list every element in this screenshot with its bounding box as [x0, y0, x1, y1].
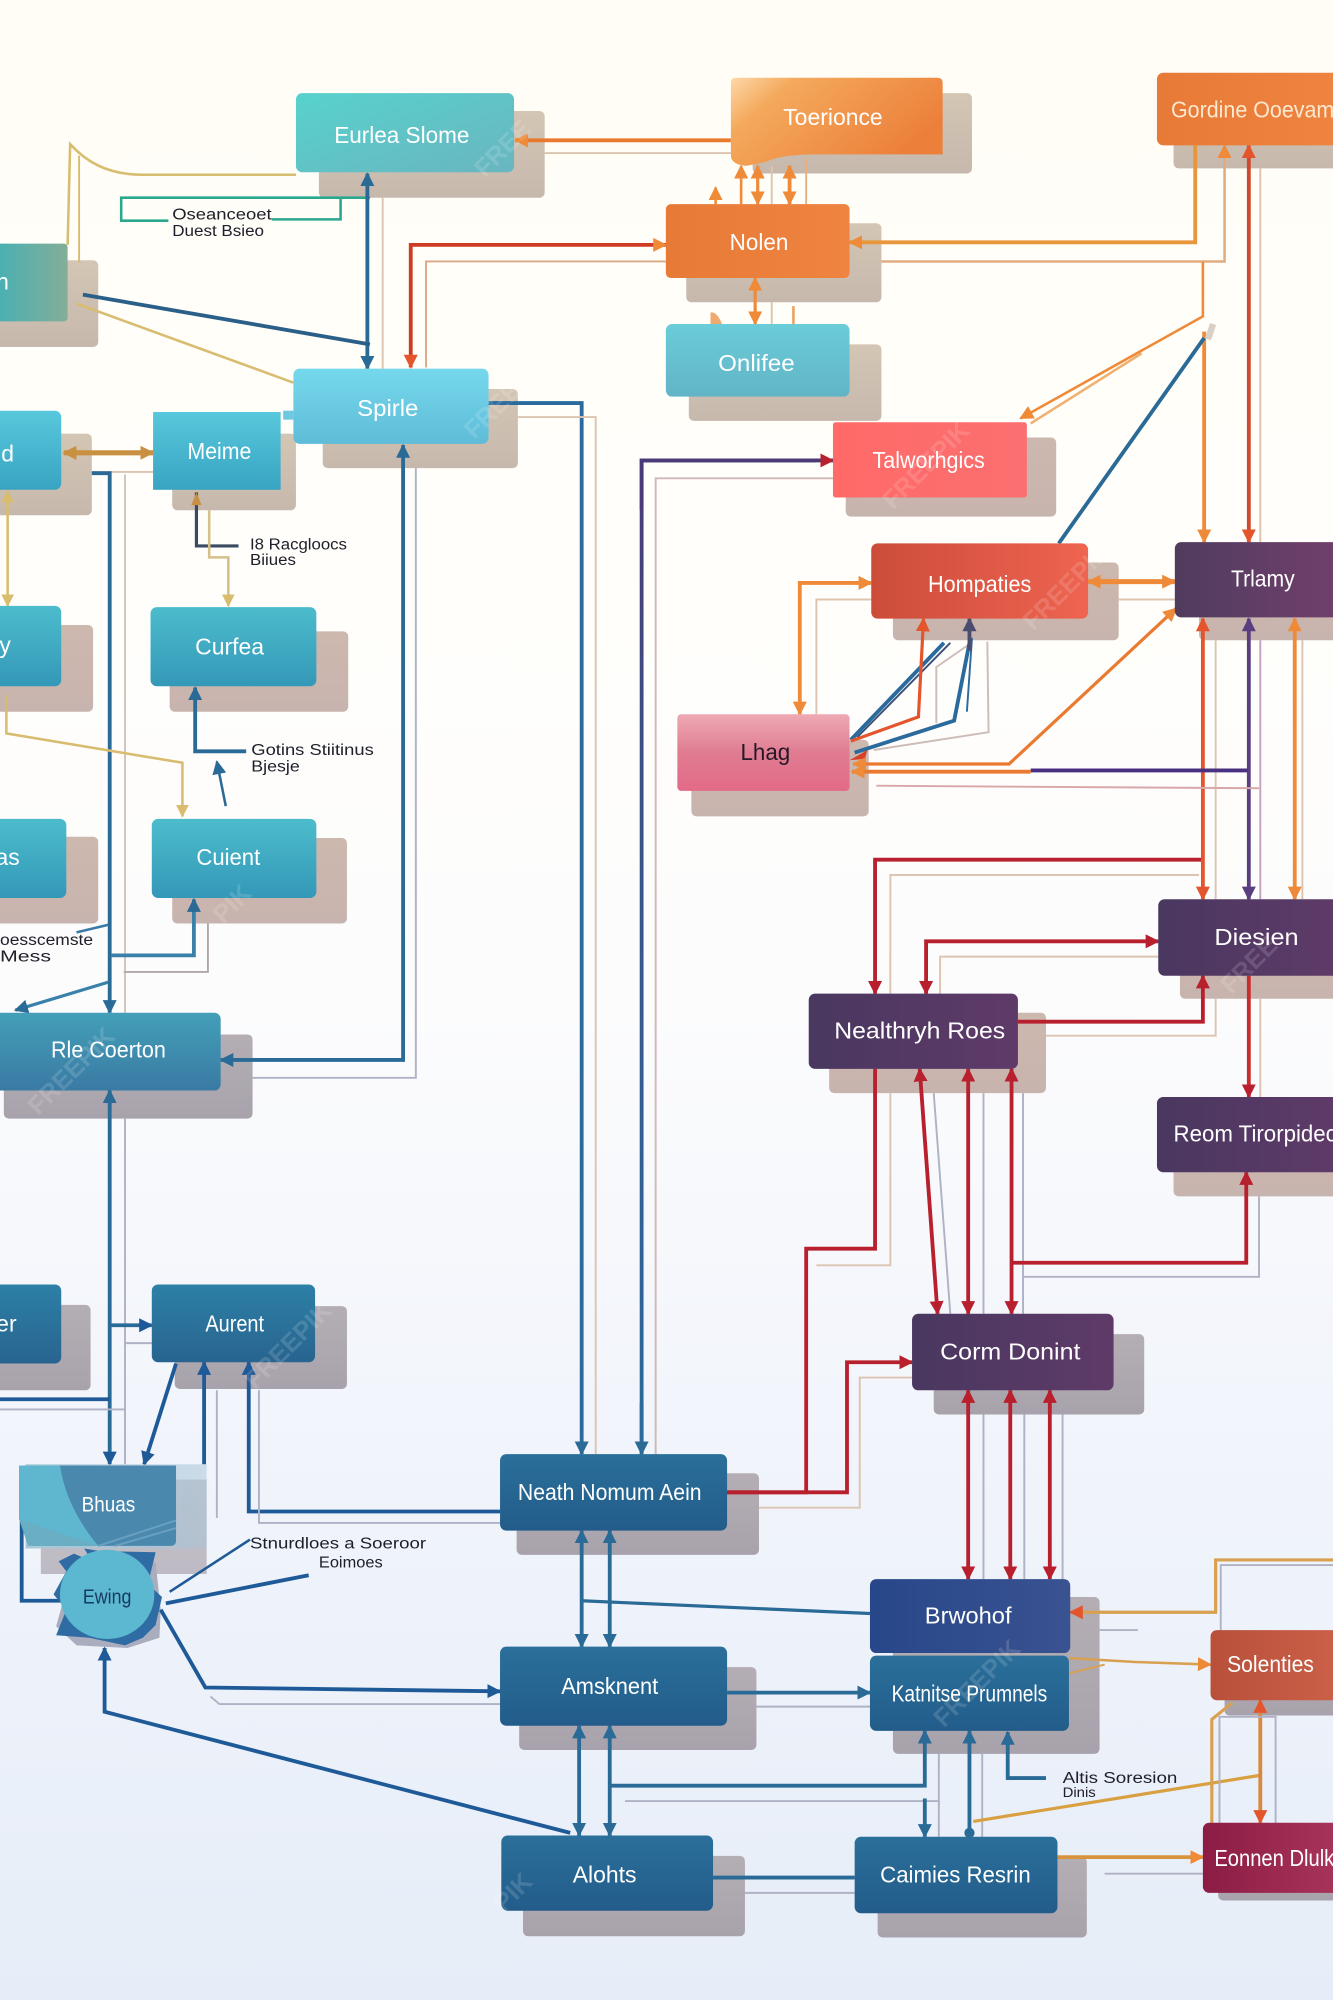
- line: gold curve from Eurlea Slome to left node: [68, 144, 296, 263]
- node: Trlamy: Trlamy: [1231, 566, 1295, 592]
- label: Racgloocs: Biiues: [250, 552, 296, 569]
- label: Racgloocs: I8 Racgloocs: [250, 537, 347, 554]
- watermark text: FREEPIK: [1018, 537, 1116, 636]
- node: d: d: [1, 441, 14, 467]
- arrow: Diesien to Reom Tirorpidec: [1249, 976, 1260, 1097]
- node: er: [0, 1284, 61, 1364]
- node: Eonnen Dlulk: [1203, 1823, 1333, 1893]
- node: Onlifee: Onlifee: [718, 350, 795, 376]
- node: Corm Donint: [912, 1314, 1114, 1390]
- line: blue diagonal Hompaties to top right: [1059, 338, 1204, 543]
- node: Solenties: Solenties: [1227, 1651, 1314, 1677]
- label: oesscemste: [0, 932, 93, 966]
- arrow: Nolen and Onlifee: [711, 278, 793, 324]
- arrow: Trlamy to Lhag, purple to orange: [852, 770, 1259, 788]
- label: Stnurdloes: Stnurdloes a Soeroor: [250, 1535, 427, 1552]
- node: Caimies Resrin: Caimies Resrin: [880, 1862, 1031, 1888]
- node: y: [0, 606, 61, 686]
- arrow: Talworhgics and Neath Nomum Aein: [642, 460, 833, 1454]
- node: Aurent: Aurent: [205, 1311, 265, 1337]
- arrow: vertical to Aurent: [0, 1325, 152, 1409]
- node: Katnitse Prumnels: Katnitse Prumnels: [892, 1681, 1047, 1707]
- label: oesscemste: Mess: [0, 949, 51, 966]
- node: Lhag: Lhag: [740, 739, 790, 765]
- label: oesscemste: oesscemste: [0, 932, 93, 949]
- arrow: Corm Donint to Reom Tirorpidec: [1012, 1172, 1259, 1277]
- node: left teal: [0, 244, 68, 321]
- arrow: Spirle to Neath Nomum Aein: [489, 403, 596, 1454]
- watermark text: FREE: [1215, 931, 1283, 999]
- bracket: teal label frame: [121, 198, 370, 221]
- node: Eurlea Slome: Eurlea Slome: [334, 122, 469, 148]
- label: Stnurdloes: [250, 1535, 427, 1572]
- node: Diesien: Diesien: [1214, 924, 1299, 950]
- arrows: orange branch to Talworhgics and Trlamy: [1020, 261, 1213, 542]
- label: Oseanceoet: Duest Bsieo: [172, 223, 264, 240]
- arrow: Toerionce to Eurlea Slome: [515, 140, 731, 153]
- arrows: Amsknent and Alohts: [579, 1726, 610, 1835]
- watermark text: FREEPIK: [240, 1296, 338, 1395]
- node: as: [0, 819, 66, 898]
- arrow: Katnitse Prumnels to Solenties: [1069, 1658, 1211, 1673]
- arrow: Caimies Resrin to Eonnen Dlulk: [1057, 1857, 1203, 1874]
- label: Altis Soresion: [1063, 1770, 1177, 1800]
- arrow: right edge to Brwohof: [1070, 1560, 1333, 1630]
- arrow: Alohts to Ewing: [105, 1648, 570, 1833]
- node: Trlamy: [1175, 542, 1333, 617]
- node: Nealthryh Roes: [809, 994, 1018, 1069]
- node: Nealthryh Roes: Nealthryh Roes: [834, 1017, 1005, 1043]
- node: Spirle: Spirle: [357, 395, 418, 421]
- label: Gotins Stiitinus: [251, 742, 374, 776]
- arrow: y to Cuient, gold: [6, 695, 182, 816]
- arrow: red link Nolen to Spirle: [411, 245, 666, 367]
- node: Hompaties: [871, 543, 1088, 619]
- arrows: Nealthryh Roes and Corm Donint: [920, 1069, 1023, 1314]
- node: Ewing circle: Ewing: [83, 1586, 131, 1608]
- label: Altis Soresion: Dinis: [1063, 1784, 1096, 1800]
- node: Cuient: [152, 819, 316, 898]
- label: Stnurdloes: Eoimoes: [319, 1555, 383, 1572]
- label: Gotins Stiitinus: Bjesje: [251, 759, 300, 776]
- arrow: Katnitse Prumnels and Caimies Resrin: [964, 1731, 975, 1838]
- node: Diesien: [1158, 899, 1333, 976]
- callout link: Katnitse Prumnels to label: [1008, 1732, 1046, 1778]
- node: Katnitse Prumnels: [870, 1656, 1069, 1731]
- arrow: Neath Nomum Aein to Aurent: [249, 1362, 500, 1523]
- node: Alohts: Alohts: [573, 1862, 637, 1888]
- node: Nolen: [666, 204, 850, 278]
- node: Brwohof: Brwohof: [925, 1603, 1012, 1629]
- arrow: Gordine and Trlamy, red: [1249, 145, 1260, 542]
- line: Alohts to Caimies Resrin: [713, 1878, 855, 1893]
- arrow: Hompaties and Trlamy: [1088, 582, 1175, 599]
- arrows: Neath Nomum Aein and Amsknent: [582, 1531, 610, 1647]
- line: Bhuas left side to Ewing: [22, 1467, 60, 1601]
- node: Meime: [153, 412, 281, 490]
- node: Toerionce: [731, 78, 943, 166]
- arrows: Toerionce and Nolen: [716, 158, 806, 204]
- watermark text: PIK: [208, 879, 258, 929]
- node: Neath Nomum Aein: [500, 1454, 727, 1531]
- arrow: Lhag and Trlamy, orange: [853, 608, 1176, 764]
- arrow: d to Bhuas vertical: [92, 473, 125, 1464]
- node: Rle Coerton: Rle Coerton: [51, 1036, 166, 1062]
- watermark text: FREEPIK: [928, 1634, 1027, 1733]
- node: Curfea: [151, 607, 316, 686]
- arrows: Neath Nomum Aein to Nealthryh Roes and Corm Donint: [727, 1069, 912, 1508]
- arrow: gold link to Solenties and Eonnen Dlulk: [973, 1700, 1276, 1823]
- node: Corm Donint: Corm Donint: [940, 1339, 1081, 1365]
- watermark text: FREEPIK: [23, 1022, 121, 1120]
- node: Spirle: [283, 369, 489, 444]
- node: Cuient: Cuient: [196, 844, 261, 870]
- watermark text: FREE: [469, 115, 537, 183]
- arrow: d and Meime: [64, 453, 153, 472]
- callout link: Curfea to label: [195, 688, 246, 806]
- line: left node to Spirle, blue: [83, 295, 370, 344]
- label: Racgloocs: [250, 537, 347, 569]
- small labels: [0, 206, 1177, 1800]
- node: Hompaties: Hompaties: [928, 571, 1031, 597]
- node: Talworhgics: [833, 422, 1027, 497]
- node: Reom Tirorpidec: [1157, 1097, 1333, 1172]
- arrows: Aurent and Bhuas: [144, 1362, 217, 1518]
- arrows: Lhag to Hompaties: [850, 619, 989, 760]
- arrow: Gordine to Nolen: [850, 145, 1225, 261]
- node: Aurent: [152, 1284, 315, 1362]
- node: Onlifee: [666, 324, 850, 397]
- arrow: Rle Coerton to Cuient: [15, 899, 208, 1010]
- node: Rle Coerton: [0, 1013, 221, 1091]
- node: Talworhgics: Talworhgics: [873, 447, 985, 473]
- node: Curfea: Curfea: [195, 633, 264, 659]
- lines: Ewing to label: [166, 1540, 309, 1603]
- node: Amsknent: [500, 1647, 727, 1726]
- watermark text: FREEPIK: [459, 346, 557, 444]
- node: Amsknent: Amsknent: [561, 1673, 659, 1699]
- node: d: [0, 411, 61, 490]
- node: Neath Nomum Aein: Neath Nomum Aein: [518, 1479, 702, 1505]
- node: Caimies Resrin: [855, 1837, 1057, 1913]
- arrows: Hompaties and Lhag, orange: [800, 583, 871, 714]
- arrows: Corm Donint and Brwohof: [968, 1390, 1063, 1579]
- arrow: Amsknent to Katnitse Prumnels: [727, 1693, 870, 1707]
- node: Bhuas folder: Bhuas: [82, 1491, 135, 1516]
- node: Nolen: Nolen: [730, 229, 788, 255]
- watermark text: PIK: [488, 1867, 539, 1918]
- line: left node to Spirle, gold: [77, 304, 293, 383]
- node: Eurlea Slome: [296, 93, 514, 172]
- label: Oseanceoet: Oseanceoet: [172, 206, 272, 223]
- label: Oseanceoet: [172, 206, 272, 240]
- node: Gordine Ooevam: [1157, 73, 1333, 145]
- node: Solenties: [1211, 1630, 1333, 1700]
- node: Meime: Meime: [188, 438, 251, 464]
- node: Brwohof: [870, 1579, 1070, 1653]
- watermark text: FREEPIK: [877, 416, 976, 514]
- arrows: Nealthryh Roes and Diesien: [875, 860, 1216, 1036]
- arrow: Alohts branch to Katnitse Prumnels: [610, 1731, 982, 1837]
- label: Altis Soresion: Altis Soresion: [1063, 1770, 1177, 1787]
- arrow: Eurlea Slome and Spirle: [367, 173, 383, 369]
- node: Lhag: [677, 714, 850, 791]
- callout link: Meime to label: [191, 492, 239, 606]
- node: Ewing circle: [54, 1548, 162, 1645]
- node: Bhuas folder: [19, 1464, 207, 1548]
- arrow: Rle Coerton and Spirle: [221, 445, 416, 1078]
- node: Toerionce: Toerionce: [783, 104, 883, 130]
- arrow: d and y, gold: [7, 491, 9, 606]
- line: Neath Nomum Aein to Brwohof: [582, 1601, 870, 1614]
- arrows: Trlamy and Diesien: [1203, 619, 1302, 899]
- node: Alohts: [501, 1835, 713, 1911]
- arrow: Ewing to Amsknent: [161, 1610, 500, 1704]
- label: Gotins Stiitinus: Gotins Stiitinus: [251, 742, 374, 759]
